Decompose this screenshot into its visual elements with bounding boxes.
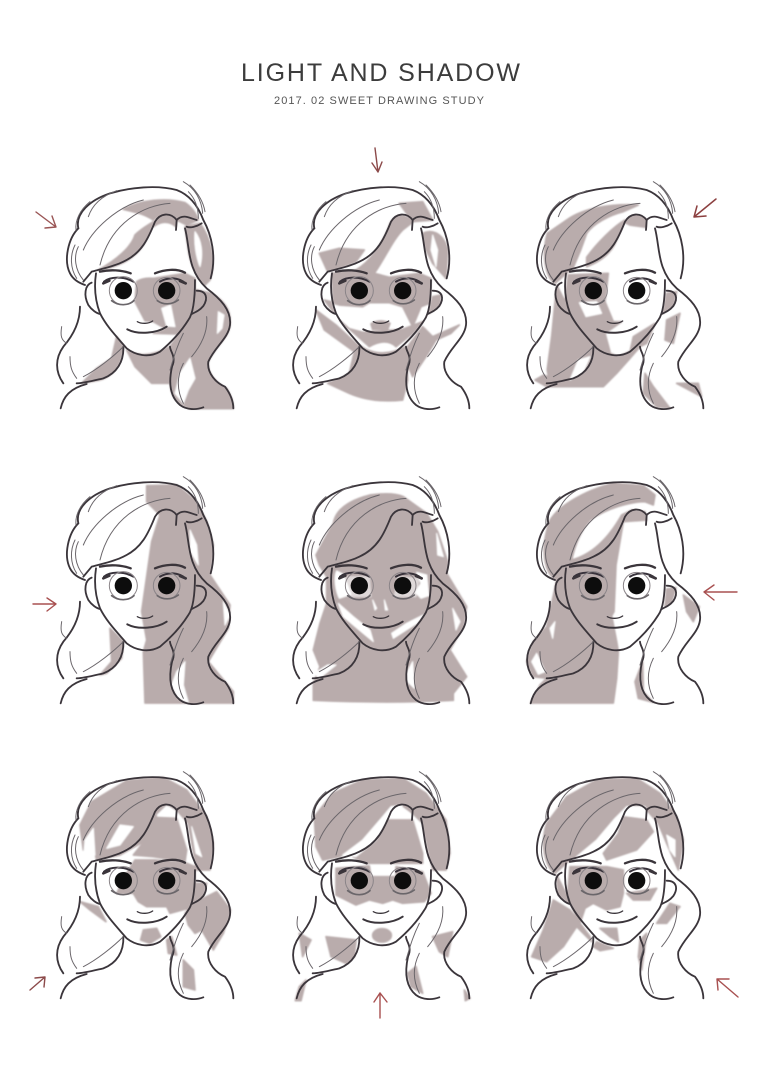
arrow: bottom right	[717, 979, 738, 997]
portrait: light from bottom right	[527, 772, 703, 999]
portrait: light from top	[293, 182, 469, 409]
portrait: light from below	[293, 772, 470, 1001]
portrait: light from left	[57, 477, 233, 704]
arrow: bottom	[374, 993, 387, 1018]
portrait: light from the front, mostly shadowed	[293, 477, 469, 704]
arrow: right	[704, 585, 737, 600]
arrow: bottom left	[30, 977, 45, 990]
portrait: light from bottom left	[57, 772, 233, 999]
title: LIGHT AND SHADOW	[241, 59, 520, 87]
arrow: top right	[694, 199, 716, 217]
portrait: light from top right	[527, 182, 703, 409]
subtitle: 2017. 02 SWEET DRAWING STUDY	[274, 95, 485, 107]
arrow: top left	[36, 212, 56, 228]
portrait: light from top left	[57, 182, 233, 409]
arrow: top	[372, 148, 382, 172]
arrow: left	[33, 598, 56, 611]
portrait: light from right	[527, 477, 703, 704]
